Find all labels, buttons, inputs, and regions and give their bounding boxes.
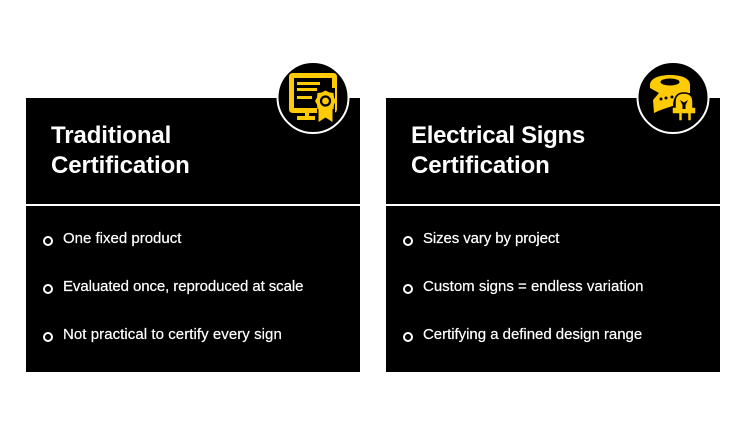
heading: electrical signs certification (411, 122, 585, 179)
bullet: defined design range: Certifying a defined design range (423, 326, 642, 343)
panel: electrical signs certification (386, 98, 720, 372)
heading: electrical signs certification: Certification (411, 152, 550, 179)
heading: traditional certification (51, 122, 190, 179)
bullet: not practical: Not practical to certify every sign (63, 326, 282, 343)
icon: tape roll and LED (636, 63, 710, 134)
bullet: one fixed product: One fixed product (63, 230, 181, 247)
bullet: custom signs: Custom signs = endless variation (423, 278, 644, 295)
heading: traditional certification: Certification (51, 152, 190, 179)
heading: traditional certification: Traditional (51, 122, 171, 149)
icon: monitor with certificate ribbon (276, 63, 350, 134)
heading: electrical signs certification: Electrical Signs (411, 122, 585, 149)
bullet: sizes vary: Sizes vary by project (423, 230, 559, 247)
bullet: evaluated once: Evaluated once, reproduced at scale (63, 278, 303, 295)
panel: traditional certification (26, 98, 360, 372)
